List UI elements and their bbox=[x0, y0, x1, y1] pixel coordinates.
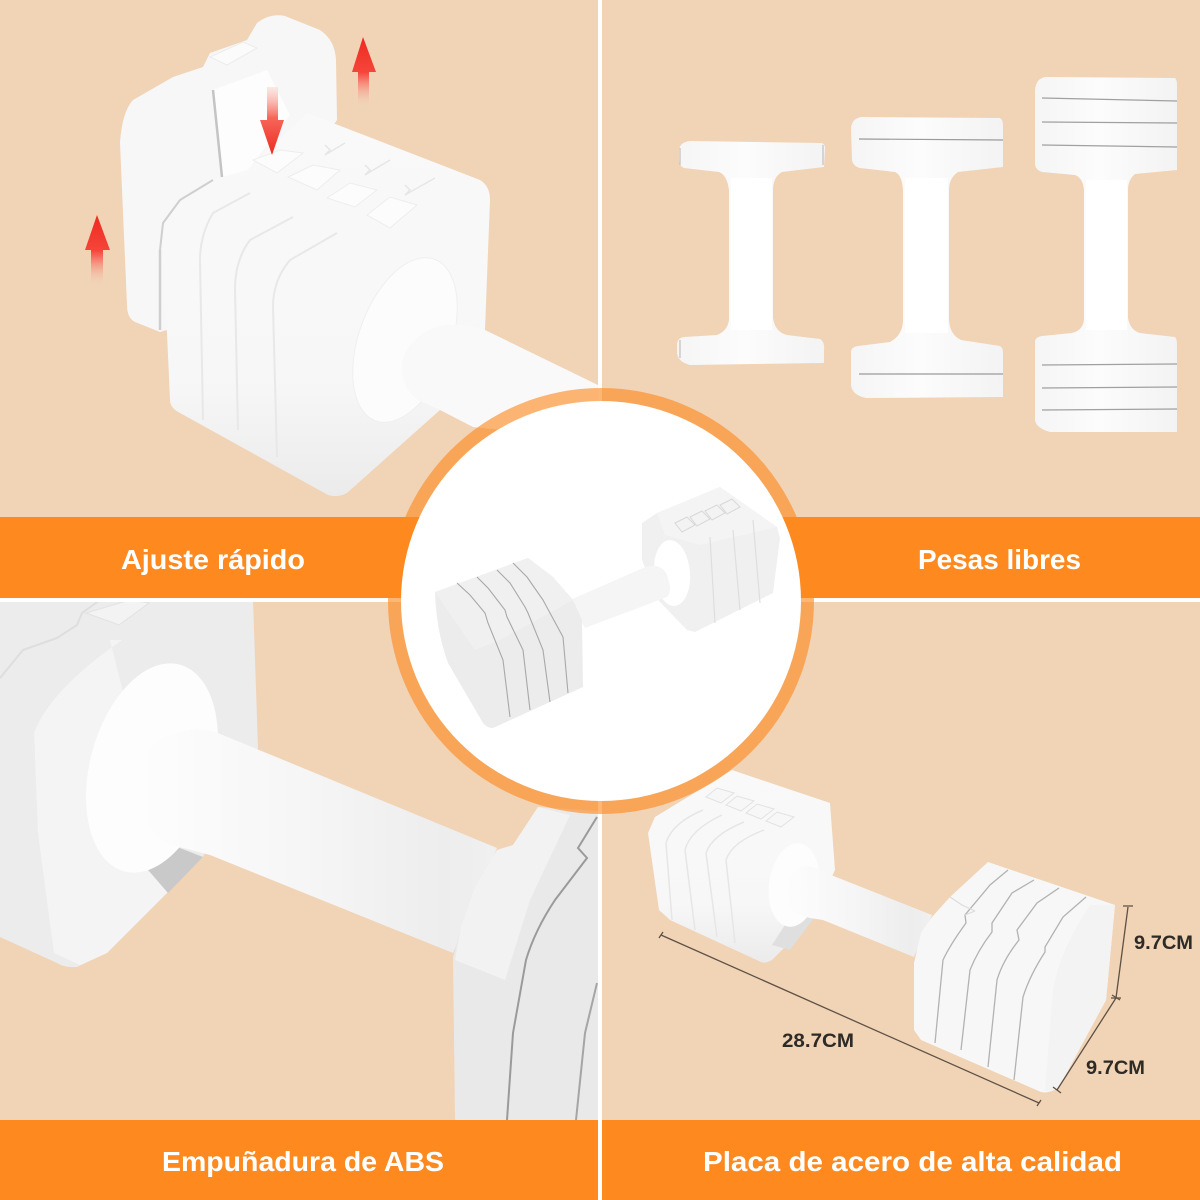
heading: free weights: Pesas libres bbox=[918, 544, 1081, 575]
arrow: up right bbox=[352, 37, 376, 107]
label: height: 9.7CM bbox=[1134, 933, 1193, 954]
arrow: down bbox=[260, 87, 284, 155]
panel: quick adjust bbox=[85, 15, 600, 496]
label: depth: 9.7CM bbox=[1086, 1058, 1145, 1079]
band: top left bbox=[0, 517, 598, 598]
dimension line: height bbox=[1111, 906, 1133, 998]
icon: far head bbox=[648, 770, 835, 963]
heading: steel plate: Placa de acero de alta calidad bbox=[703, 1146, 1122, 1177]
icon: right head bbox=[453, 807, 598, 1120]
icon: medium dumbbell bbox=[851, 117, 1003, 398]
band: top right bbox=[602, 517, 1200, 598]
icon: small dumbbell bbox=[677, 141, 825, 365]
band: bottom left bbox=[0, 1120, 598, 1200]
icon: large dumbbell bbox=[1035, 77, 1177, 432]
panel: free weights bbox=[677, 77, 1177, 432]
icon: left head bbox=[0, 600, 258, 967]
heading: quick adjust: Ajuste rápido bbox=[121, 544, 305, 575]
panel: steel plate dimensions bbox=[648, 770, 1193, 1106]
band: bottom right bbox=[602, 1120, 1200, 1200]
center circle bbox=[388, 388, 814, 814]
heading: ABS grip: Empuñadura de ABS bbox=[162, 1146, 444, 1177]
dimension line: depth bbox=[1053, 995, 1120, 1093]
dimension line: length bbox=[659, 932, 1041, 1106]
icon: center dumbbell bbox=[435, 487, 780, 728]
icon: grip bbox=[139, 729, 497, 953]
label: length: 28.7CM bbox=[782, 1031, 854, 1052]
icon: bar bbox=[785, 866, 932, 957]
panel: ABS grip bbox=[0, 600, 598, 1120]
arrow: up left bbox=[85, 215, 110, 286]
icon: near head bbox=[914, 862, 1115, 1092]
icon: dumbbell head with selector bbox=[120, 15, 600, 496]
